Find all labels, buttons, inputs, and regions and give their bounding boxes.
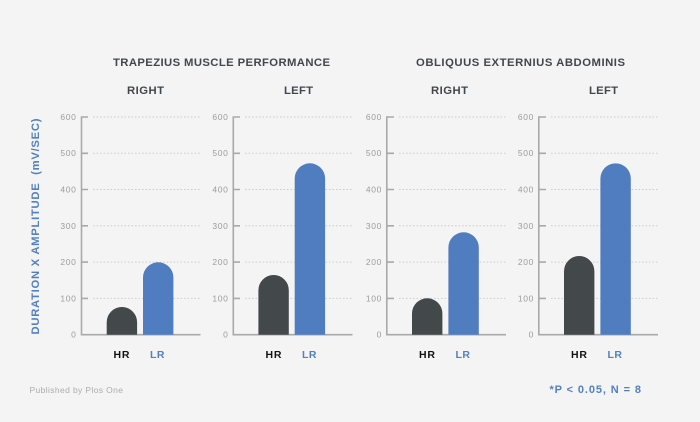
- axis labels: 600: [60, 112, 76, 122]
- label: LR: LR: [608, 349, 622, 361]
- bar: HR: [412, 298, 442, 335]
- bar: LR: [600, 163, 631, 335]
- heading: trapezius muscle performance: TRAPEZIUS MUSCLE PERFORMANCE: [113, 57, 330, 69]
- axis labels: 600: [212, 112, 228, 122]
- source note: Published by Plos One: [30, 385, 123, 395]
- label: LR: LR: [456, 349, 470, 361]
- subheading: left: LEFT: [284, 85, 313, 97]
- label: LR: LR: [150, 349, 165, 361]
- axis labels: 500: [212, 148, 228, 158]
- axis labels: 500: [366, 148, 382, 158]
- axis labels: 0: [71, 330, 76, 340]
- axis labels: 400: [60, 184, 76, 194]
- axis labels: 0: [529, 330, 534, 340]
- bar: LR: [295, 163, 325, 335]
- axis labels: 100: [60, 294, 76, 304]
- axis labels: 200: [212, 257, 228, 267]
- axis labels: 300: [212, 221, 228, 231]
- label: HR: HR: [266, 349, 282, 361]
- bar: HR: [564, 256, 594, 335]
- axis labels: [366, 112, 382, 340]
- axis labels: 500: [518, 148, 534, 158]
- axis labels: 100: [366, 294, 382, 304]
- subheading: right: RIGHT: [431, 85, 468, 97]
- bar: LR: [448, 232, 479, 335]
- label: HR: HR: [419, 349, 435, 361]
- panel: trapezius right: [60, 85, 200, 361]
- panel: obliquus right: [366, 85, 506, 361]
- panel: trapezius left: [212, 85, 352, 361]
- heading: obliquus externius abdominis: OBLIQUUS EXTERNIUS ABDOMINIS: [416, 57, 625, 69]
- axis labels: 300: [60, 221, 76, 231]
- bar: HR: [258, 275, 289, 335]
- axis labels: 100: [518, 294, 534, 304]
- axis labels: [518, 112, 534, 340]
- axis labels: 400: [366, 184, 382, 194]
- axis labels: 200: [366, 257, 382, 267]
- axis labels: 300: [366, 221, 382, 231]
- axis labels: 400: [212, 184, 228, 194]
- label: LR: LR: [302, 349, 317, 361]
- y axis title: DURATION X AMPLITUDE (mV/SEC): [30, 118, 42, 334]
- axis labels: 200: [60, 257, 76, 267]
- axis labels: 400: [518, 184, 534, 194]
- axis labels: 600: [518, 112, 534, 122]
- axis labels: 500: [60, 148, 76, 158]
- axis labels: 100: [212, 294, 228, 304]
- significance note: *P < 0.05, N = 8: [550, 384, 641, 396]
- axis labels: 300: [518, 221, 534, 231]
- axis labels: 0: [223, 330, 228, 340]
- bar: LR: [143, 262, 173, 335]
- subheading: left: LEFT: [589, 85, 618, 97]
- axis labels: [212, 112, 228, 340]
- axis labels: 0: [377, 330, 382, 340]
- axis labels: 200: [518, 257, 534, 267]
- panel: obliquus left: [518, 85, 658, 361]
- label: HR: HR: [571, 349, 587, 361]
- bar: HR: [107, 307, 137, 335]
- axis labels: 600: [366, 112, 382, 122]
- subheading: right: RIGHT: [127, 85, 164, 97]
- label: HR: HR: [114, 349, 130, 361]
- axis labels: [60, 112, 76, 340]
